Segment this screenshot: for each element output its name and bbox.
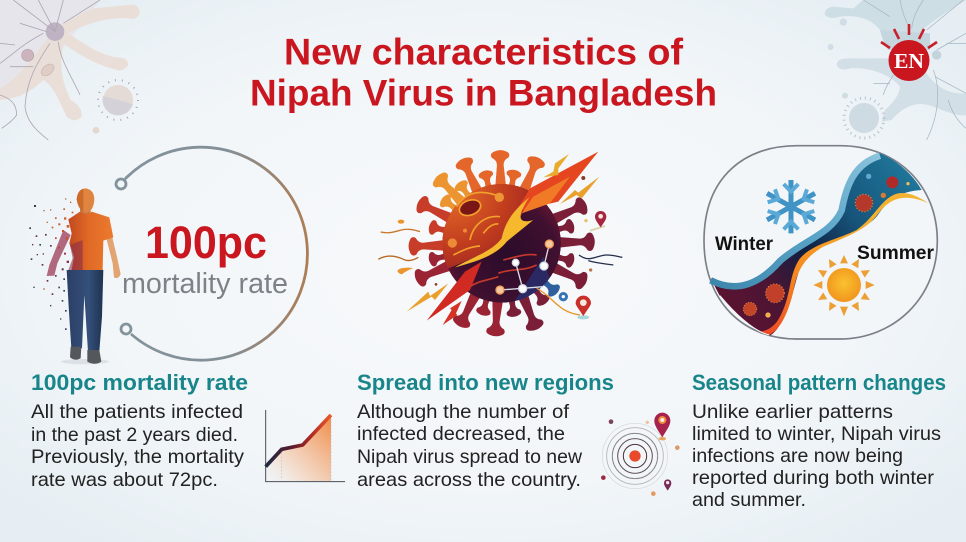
panel: mortality [29, 147, 345, 491]
text block: seasonal: reported during both winter [692, 467, 935, 489]
text block: seasonal [692, 401, 941, 511]
ribbon [711, 153, 922, 336]
title: New characteristics of [284, 30, 684, 72]
text block: seasonal: infections are now being [692, 445, 903, 467]
decoration: neuron top left [0, 0, 140, 140]
cell detail [453, 192, 537, 287]
text block: mortality: Previously, the mortality [31, 446, 244, 468]
text block: mortality: All the patients infected [31, 401, 243, 423]
decoration: neuron top right [825, 0, 966, 140]
logo: EN sunrise badge: EN [894, 49, 924, 73]
panel: spread [357, 150, 680, 496]
capsule outline [704, 146, 937, 339]
viruses on ribbon [743, 174, 910, 318]
text block: spread [357, 401, 583, 491]
illustration: season capsule [704, 146, 937, 339]
icon: snowflake [767, 180, 815, 233]
heading: seasonal pattern changes: Seasonal pattern changes [692, 370, 946, 395]
heading: 100pc mortality rate: 100pc mortality rate [31, 370, 248, 395]
stat label: mortality rate: mortality rate [122, 268, 288, 300]
label: summer: Summer [857, 242, 934, 264]
yellow streak [455, 197, 533, 267]
sparks and squiggles [378, 229, 622, 265]
text block: seasonal: limited to winter, Nipah virus [692, 423, 941, 445]
title: Nipah Virus in Bangladesh [250, 72, 717, 114]
text block: mortality: in the past 2 years died. [31, 424, 238, 446]
route to map pin [537, 288, 580, 315]
illustration: virus [378, 150, 622, 337]
lightning wedges [516, 152, 598, 212]
text block: mortality: rate was about 72pc. [31, 469, 218, 491]
text block: spread: Nipah virus spread to new [357, 446, 583, 468]
icon: sun [813, 255, 875, 316]
map pin small [590, 211, 606, 231]
label: winter: Winter [715, 234, 774, 255]
logo: EN sunrise badge [881, 24, 937, 81]
chart: rising line [266, 410, 345, 482]
network nodes [496, 240, 553, 294]
panel: seasonal [692, 146, 946, 511]
stat: 100pc: 100pc [145, 217, 267, 268]
illustration: disintegrating man [29, 188, 121, 364]
virus body [442, 184, 561, 303]
text block: spread: infected decreased, the [357, 423, 565, 445]
text block: seasonal: Unlike earlier patterns [692, 401, 893, 423]
title [250, 30, 717, 114]
decoration: small virus right [844, 98, 884, 138]
text block: seasonal: and summer. [692, 489, 806, 511]
heading: spread into new regions: Spread into new regions [357, 370, 614, 395]
virus spikes [408, 150, 595, 337]
icon: radar with map pins [601, 413, 680, 496]
decoration: small virus left [98, 80, 138, 120]
text block: spread: Although the number of [357, 401, 570, 423]
ring around mortality stat [116, 147, 307, 360]
text block: spread: areas across the country. [357, 469, 581, 491]
text block: mortality [31, 401, 244, 491]
map pin large [576, 296, 591, 319]
